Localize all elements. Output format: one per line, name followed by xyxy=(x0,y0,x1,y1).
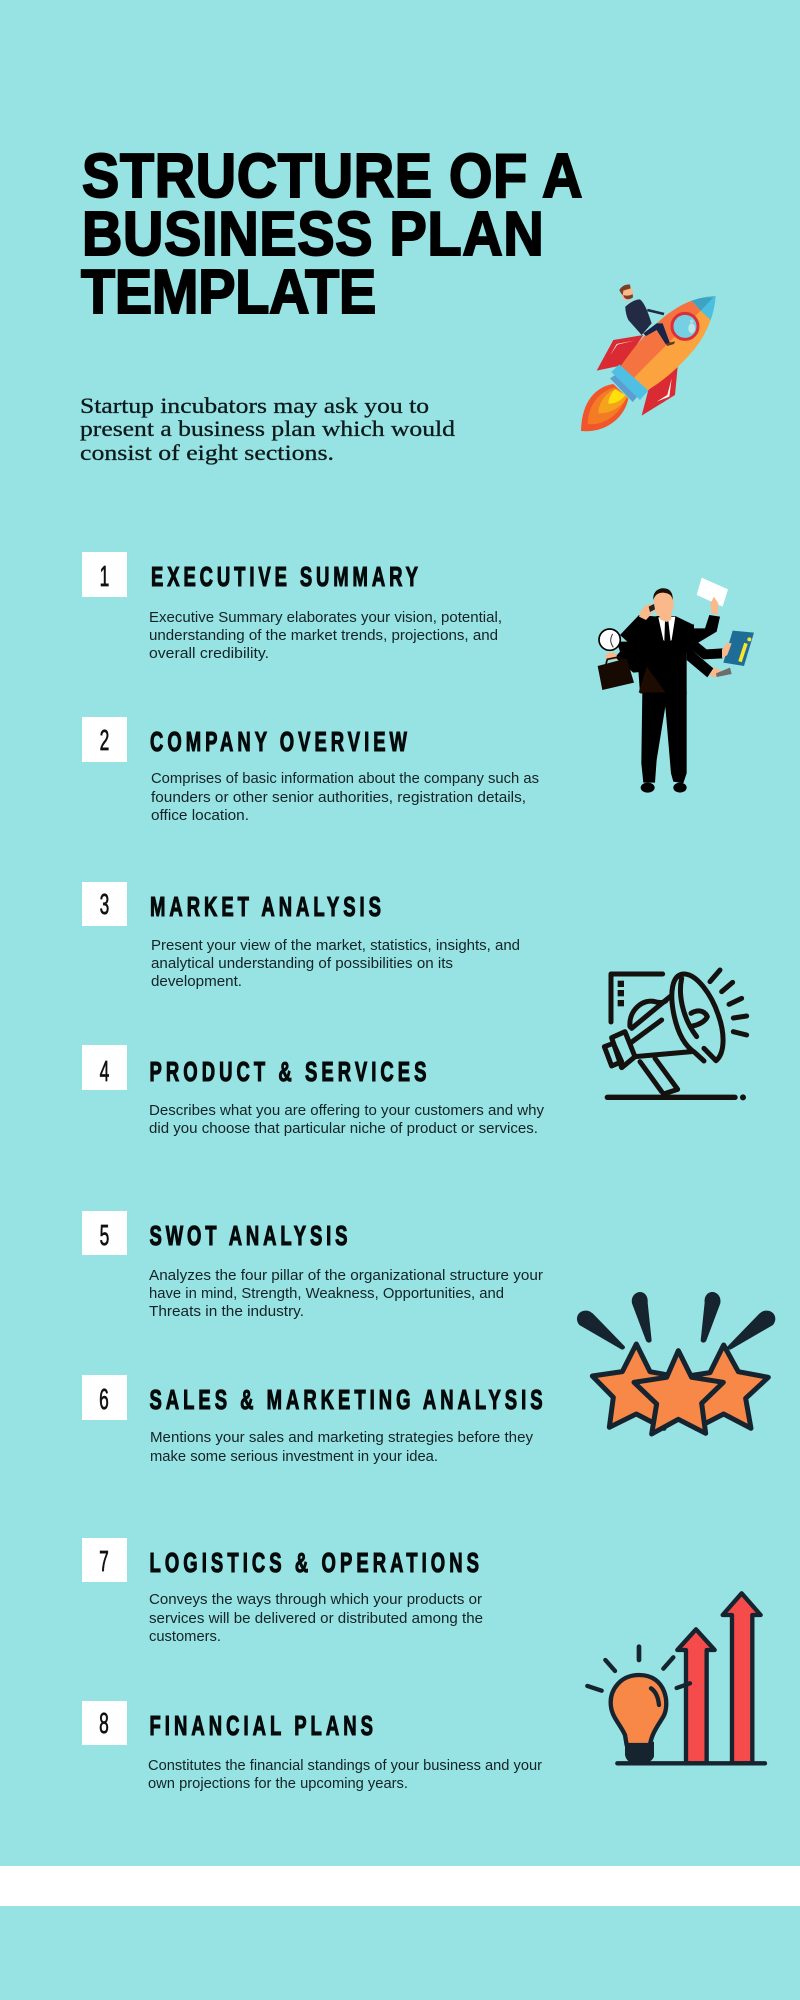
title: BUSINESS PLAN xyxy=(82,200,544,269)
title xyxy=(81,142,582,327)
section 2: company overview: office location. xyxy=(151,808,249,824)
section 5: swot analysis: have in mind, Strength, Weakness, Opportunities, and xyxy=(149,1286,504,1302)
section 6: sales and marketing analysis: 6 xyxy=(99,1384,109,1416)
intro text: consist of eight sections. xyxy=(80,440,334,465)
icon: megaphone xyxy=(604,970,747,1100)
section 4: product and services xyxy=(82,1045,545,1137)
section 3: market analysis: Present your view of the market, statistics, insights, and xyxy=(151,938,520,954)
section 3: market analysis: MARKET ANALYSIS xyxy=(150,892,381,923)
section 1: executive summary xyxy=(82,552,502,662)
section 2: company overview: founders or other senior authorities, registration details, xyxy=(151,790,526,806)
section 6: sales and marketing analysis: Mentions your sales and marketing strategies before they xyxy=(150,1430,534,1446)
intro text: Startup incubators may ask you to xyxy=(80,393,429,418)
icon: three stars xyxy=(577,1292,775,1434)
section 1: executive summary: 1 xyxy=(100,561,109,593)
section 6: sales and marketing analysis xyxy=(82,1375,543,1465)
section 7: logistics and operations: customers. xyxy=(149,1629,221,1645)
section 8: financial plans xyxy=(82,1701,542,1792)
section 8: financial plans: own projections for the upcoming years. xyxy=(148,1776,408,1792)
section 3: market analysis: analytical understanding of possibilities on its xyxy=(151,956,453,972)
section 5: swot analysis xyxy=(82,1211,543,1320)
icon: multitasking businessman xyxy=(598,578,754,793)
section 1: executive summary: Executive Summary elaborates your vision, potential, xyxy=(149,610,502,626)
section 2: company overview xyxy=(82,717,539,824)
section 1: executive summary: understanding of the market trends, projections, and xyxy=(149,628,498,644)
title: TEMPLATE xyxy=(81,258,376,327)
section 4: product and services: 4 xyxy=(100,1056,109,1088)
section 6: sales and marketing analysis: make some serious investment in your idea. xyxy=(150,1449,438,1465)
section 5: swot analysis: Threats in the industry. xyxy=(149,1304,304,1320)
section 5: swot analysis: Analyzes the four pillar of the organizational structure your xyxy=(149,1268,543,1284)
section 7: logistics and operations: services will be delivered or distributed among the xyxy=(149,1611,483,1627)
section 1: executive summary: EXECUTIVE SUMMARY xyxy=(151,562,418,593)
section 2: company overview: Comprises of basic information about the company such as xyxy=(151,771,539,787)
section 2: company overview: 2 xyxy=(100,725,109,757)
section 4: product and services: did you choose that particular niche of product or services. xyxy=(149,1121,538,1137)
section 7: logistics and operations: LOGISTICS & OPERATIONS xyxy=(150,1548,479,1579)
section 1: executive summary: overall credibility. xyxy=(149,646,269,662)
white band xyxy=(0,1866,800,1906)
icon: rocket with businessman xyxy=(581,285,716,431)
intro text xyxy=(80,393,455,465)
section 3: market analysis xyxy=(82,882,520,990)
section 3: market analysis: development. xyxy=(151,974,242,990)
section 5: swot analysis: 5 xyxy=(100,1220,109,1252)
section 7: logistics and operations: Conveys the ways through which your products or xyxy=(149,1592,482,1608)
section 4: product and services: PRODUCT & SERVICES xyxy=(150,1057,427,1088)
section 2: company overview: COMPANY OVERVIEW xyxy=(150,727,407,758)
section 5: swot analysis: SWOT ANALYSIS xyxy=(150,1221,348,1252)
icon: light bulb and growth arrows xyxy=(587,1593,765,1763)
section 3: market analysis: 3 xyxy=(100,889,109,921)
section 4: product and services: Describes what you are offering to your customers and why xyxy=(149,1103,545,1119)
section 8: financial plans: 8 xyxy=(99,1708,109,1740)
section 8: financial plans: FINANCIAL PLANS xyxy=(150,1711,373,1742)
intro text: present a business plan which would xyxy=(80,416,455,441)
title: STRUCTURE OF A xyxy=(82,142,582,211)
section 7: logistics and operations: 7 xyxy=(99,1546,109,1578)
section 6: sales and marketing analysis: SALES & MARKETING ANALYSIS xyxy=(150,1385,543,1416)
section 8: financial plans: Constitutes the financial standings of your business and your xyxy=(148,1758,542,1774)
section 7: logistics and operations xyxy=(82,1538,483,1645)
